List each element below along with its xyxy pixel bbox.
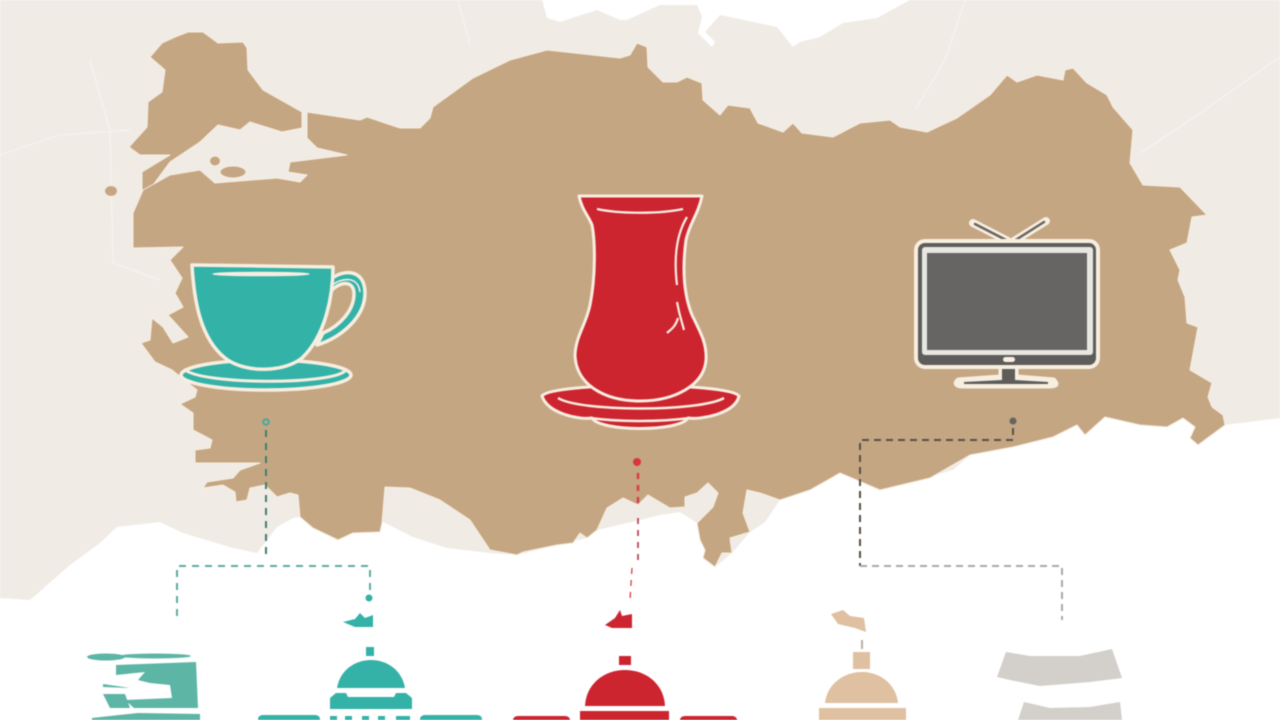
connector: teal: [177, 419, 370, 616]
icon: Turkish tea glass: [542, 196, 739, 428]
tv antenna: [973, 221, 1046, 241]
icon fragment: teal shoe: [343, 613, 373, 627]
cup handle: [317, 273, 365, 345]
connector dot: teal: [366, 594, 372, 602]
tv bezel: [916, 241, 1098, 367]
icon: tan dome building: [819, 610, 906, 720]
icon: teal dome building: [258, 647, 482, 720]
islands: [210, 156, 220, 166]
icon: red dome building: [513, 656, 737, 720]
icon: television: [916, 221, 1098, 387]
glass saucer: [542, 386, 739, 428]
Anatolia: [133, 43, 1225, 567]
tv stand: [955, 360, 1057, 387]
icon: coffee cup: [181, 265, 365, 390]
cup bowl: [192, 265, 333, 369]
glass body: [575, 196, 706, 401]
connector: grey: [860, 418, 1062, 620]
black sea at top edge: [542, 0, 910, 47]
connector: red: [630, 458, 641, 600]
icon: teal stack smears: [87, 654, 200, 720]
cup rim highlight: [213, 272, 309, 276]
glass highlights: [597, 209, 687, 333]
cup saucer: [181, 360, 351, 390]
icon fragment: red shoe: [605, 610, 632, 628]
tv screen: [927, 253, 1087, 350]
map of Turkey: [104, 32, 1225, 567]
icon: grey stack smears: [997, 649, 1122, 720]
Thrace: [129, 32, 302, 200]
